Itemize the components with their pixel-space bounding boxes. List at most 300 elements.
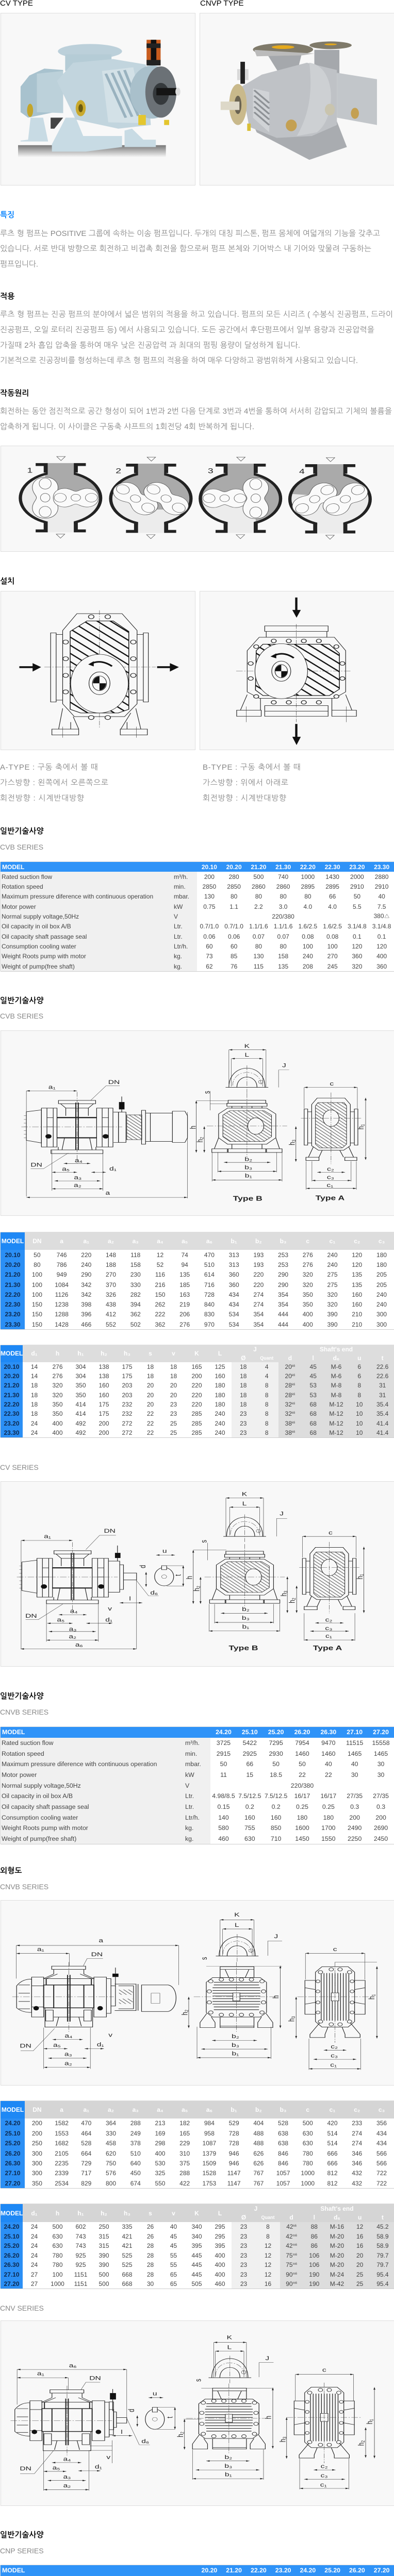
table: CVB dimensions part 1: 360 (229, 1271, 239, 1278)
table: CVB dimensions part 2: h (56, 1350, 59, 1357)
table: CVB series specifications: Oil capacity in oil box A/B (2, 923, 71, 930)
table: CVB dimensions part 1: 270 (106, 1271, 116, 1278)
table: CVB dimensions part 1: 240 (327, 1251, 337, 1259)
side view with shaft: d (127, 2409, 136, 2412)
table: CVB dimensions part 1: 94 (181, 1261, 188, 1268)
table: CVB dimensions part 1: 135 (179, 1271, 190, 1278)
table: CNVB dimensions part 1: 1057 (276, 2170, 290, 2177)
table: CVB dimensions part 1: 210 (352, 1321, 362, 1328)
diagram step 3: 3 (208, 467, 214, 475)
front view (176, 2334, 273, 2480)
table: CNVB dimensions part 2: 925 (75, 2252, 86, 2259)
table: CVB dimensions part 2: 18 (240, 1392, 247, 1399)
side view with motor: a₃ (74, 1174, 81, 1180)
side view with motor: a₄ (64, 2032, 73, 2039)
table: CVB dimensions part 2: 41.4 (376, 1420, 388, 1427)
side view Type A (288, 1080, 366, 1202)
table: CVB dimensions part 2: 18 (31, 1382, 38, 1389)
table: CNVB dimensions part 1: 528 (81, 2140, 91, 2147)
table: CVB series specifications: 1000 (301, 873, 315, 880)
table: CVB dimensions part 2: s (149, 1350, 152, 1357)
table: CVB series specifications: 4.0 (304, 903, 312, 910)
table: CVB dimensions part 2: 180 (215, 1392, 225, 1399)
table: CNVB series specifications: Weight Roots pump with motor (2, 1824, 88, 1832)
table: CVB dimensions part 2: 53 (310, 1382, 317, 1389)
table: CVB dimensions part 2: 200 (191, 1372, 202, 1380)
table: CVB series specifications: Oil capacity shaft passage seal (2, 933, 87, 940)
side view with motor: DN (20, 2043, 31, 2049)
table: CVB series specifications: 80 (231, 893, 237, 900)
table: CVB dimensions part 1: 434 (229, 1301, 239, 1308)
side view with motor (12, 1937, 179, 2069)
table: CNVB dimensions part 2: 390 (98, 2252, 109, 2259)
table: CNP series specifications: 20.20 (201, 2567, 217, 2574)
table: CNVB dimensions part 1: 780 (303, 2160, 313, 2167)
table: CVB dimensions part 1: 275 (327, 1281, 337, 1289)
panel: CNVB outline drawing (1, 1900, 394, 2086)
table: CNVB dimensions part 2: 23 (240, 2252, 247, 2259)
table: CNVB dimensions part 1: 728 (229, 2140, 239, 2147)
table: CNVB dimensions part 2: M-16 (330, 2223, 344, 2230)
table: CVB dimensions part 1: a₃ (133, 1238, 139, 1245)
table: CNVB dimensions part 1 (1, 2101, 394, 2188)
table: CVB dimensions part 1: 470 (204, 1251, 215, 1259)
table: CNVB series specifications: 15 (246, 1771, 253, 1778)
table: CNVB series specifications: kg. (185, 1824, 193, 1832)
front view Type B: Type B (229, 1645, 258, 1652)
table: CVB dimensions part 2: M-12 (329, 1401, 343, 1408)
side view Type A: c₁ (326, 1182, 334, 1188)
text block: B-type installation notes: B-TYPE : 구동 축에서 볼 때 (203, 763, 301, 772)
table: CVB dimensions part 2: 240 (215, 1420, 225, 1427)
table: CVB dimensions part 2: 18 (240, 1372, 247, 1380)
table: CVB series specifications: 21.20 (251, 863, 266, 871)
table: CNVB dimensions part 1: 1000 (301, 2170, 315, 2177)
table: CNVB dimensions part 1: 750 (106, 2160, 116, 2167)
table: CNVB series specifications: 0.25 (296, 1803, 308, 1810)
table: CNVB dimensions part 2: 65 (170, 2271, 177, 2278)
table: CNVB dimensions part 2: h₁ (77, 2210, 84, 2217)
table: CVB dimensions part 2: 45 (310, 1363, 317, 1370)
table: CNVB dimensions part 1: 1528 (203, 2170, 216, 2177)
table: CVB dimensions part 1: 326 (106, 1291, 116, 1298)
table: CVB dimensions part 1: 786 (57, 1261, 67, 1268)
table: CNVB series specifications: 26.30 (320, 1728, 336, 1736)
table: CNVB series specifications (1, 1727, 394, 1844)
table: CNVB dimensions part 1: 1379 (203, 2150, 216, 2157)
table: CVB series specifications: 200 (204, 873, 215, 880)
table: CNVB dimensions part 1: 364 (106, 2120, 116, 2127)
table: CNVB series specifications: 27.10 (347, 1728, 363, 1736)
front view (180, 1911, 282, 2059)
table: CVB dimensions part 1: 80 (34, 1261, 41, 1268)
table: CVB dimensions part 2: 8 (265, 1420, 269, 1427)
table: CNVB dimensions part 2: 45 (170, 2233, 177, 2240)
table: CVB dimensions part 2: 350 (52, 1410, 63, 1417)
table: CNVB dimensions part 2: 24 (31, 2223, 38, 2230)
table: CVB dimensions part 2: 4 (265, 1363, 269, 1370)
table: CNVB series specifications: 220/380 (291, 1782, 314, 1789)
table: CNVB series specifications: 1465 (374, 1750, 388, 1757)
table: CNVB dimensions part 2: 12 (356, 2223, 363, 2230)
table: CNVB series specifications: Weight of pump(free shaft) (2, 1835, 76, 1842)
front view Type B: h (185, 1576, 194, 1580)
table: CNVB dimensions part 1: 1509 (203, 2160, 216, 2167)
table: CNVB dimensions part 1: 300 (32, 2170, 42, 2177)
table: CVB dimensions part 2: 285 (191, 1420, 202, 1427)
table: CVB dimensions part 2: 240 (215, 1429, 225, 1436)
table: CVB series specifications: m³/h. (174, 873, 188, 880)
front view Type B: b₁ (242, 1623, 250, 1630)
table: CVB dimensions part 1: 216 (155, 1281, 165, 1289)
table: CNVB series specifications: kg. (185, 1835, 193, 1842)
table: CNVB dimensions part 2: h₃ (124, 2210, 130, 2217)
table: CNVB dimensions part 2: 79.7 (376, 2252, 389, 2259)
table: CVB dimensions part 1: b₁ (231, 1238, 237, 1245)
table: CNVB series specifications: 50 (272, 1760, 280, 1768)
table: CVB dimensions part 2: h₁ (77, 1350, 84, 1357)
front view Type B: J (280, 1511, 284, 1517)
table: CNVB dimensions part 2: 55 (170, 2252, 177, 2259)
table: CNVB dimensions part 1: c₂ (354, 2106, 360, 2113)
table: CVB dimensions part 1: 728 (204, 1291, 215, 1298)
table: CNVB dimensions part 2: 1151 (74, 2280, 87, 2287)
table: CNVB series specifications: 160 (244, 1814, 255, 1821)
table: CNVB series specifications: 7295 (269, 1739, 283, 1747)
table: CNVB dimensions part 2: 525 (122, 2261, 133, 2268)
table: CNVB dimensions part 2: 24 (31, 2242, 38, 2249)
side view with motor (21, 1079, 188, 1198)
table: CVB dimensions part 1: b₂ (255, 1238, 262, 1245)
table: CNVB dimensions part 2: 315 (98, 2242, 109, 2249)
table: CVB series specifications: 2.2 (254, 903, 263, 910)
heading: outline CNVB: 외형도 (0, 1867, 22, 1875)
table: CVB dimensions part 2: 23.20 (4, 1420, 20, 1427)
table: CNVB dimensions part 1: 666 (327, 2160, 337, 2167)
table: CNVB dimensions part 1: a (60, 2106, 63, 2113)
table: CVB series specifications: 158 (278, 953, 288, 960)
table: CVB series specifications: 0.08 (302, 933, 314, 940)
side view with shaft: a₅ (53, 2465, 60, 2471)
table: CVB dimensions part 2: 24 (31, 1429, 38, 1436)
table: CVB dimensions part 1: 320 (327, 1301, 337, 1308)
table: CVB dimensions part 1: 23.20 (5, 1311, 21, 1318)
side view with shaft (17, 1528, 159, 1649)
table: CNVB dimensions part 1: 27.10 (5, 2170, 21, 2177)
table: CVB dimensions part 1: 398 (81, 1301, 91, 1308)
table: CNVB dimensions part 1: 800 (106, 2180, 116, 2187)
side view: c₁ (330, 2061, 337, 2068)
table: CNVB dimensions part 1: 550 (155, 2180, 165, 2187)
table: CVB dimensions part 1: 400 (303, 1311, 313, 1318)
table: CVB dimensions part 2: 14 (31, 1372, 38, 1380)
table: CNVB dimensions part 1: 356 (376, 2120, 387, 2127)
table: CVB series specifications: 0.1 (353, 933, 362, 940)
table: CVB series specifications: Ltr. (174, 933, 183, 940)
side view with motor: d₁ (97, 2041, 104, 2048)
table: CNVB dimensions part 2: M-24 (330, 2271, 344, 2278)
side view Type A: c₃ (327, 1174, 334, 1180)
table: CNVB dimensions part 2: 668 (122, 2271, 133, 2278)
side view Type A: h₃ (288, 1140, 297, 1145)
table: CNVB dimensions part 1: 767 (253, 2170, 264, 2177)
table: CNVB dimensions part 1: 325 (155, 2170, 165, 2177)
text block: applications paragraph: 기본적으로 진공장비를 형성하는데 루츠 형 펌프의 적용을 하여 매우 다양하고 광범위하게 사용되고 있습니다. (0, 357, 358, 365)
table: CNVB dimensions part 1: c (306, 2106, 309, 2113)
table: CNP series specifications (1, 2565, 394, 2576)
front view: b₂ (232, 2033, 239, 2040)
side view with motor: a₂ (74, 1182, 81, 1188)
table: CVB dimensions part 1: 716 (204, 1281, 215, 1289)
front view: J (265, 2355, 269, 2362)
table: CNVB series specifications: 11 (220, 1771, 227, 1778)
side view with shaft: a₄ (70, 1608, 78, 1614)
table: CNVB dimensions part 2: 421 (122, 2233, 133, 2240)
text block: applications paragraph: 진공펌프, 오일 로터리 진공펌프 등) 에서 사용되고 있습니다. 도든 공간에서 후단펌프에서 일부 용량과 진공압력을 (0, 326, 374, 334)
side view with shaft: a₆ (69, 2363, 77, 2369)
table: CNVB series specifications: 710 (271, 1835, 281, 1842)
series label: CVB: CVB SERIES (0, 843, 43, 851)
table: CVB dimensions part 2: v (172, 1350, 175, 1357)
table: CVB dimensions part 2: 18 (31, 1410, 38, 1417)
table: CVB dimensions part 1: 354 (278, 1291, 288, 1298)
table: CNVB series specifications: 22 (325, 1771, 332, 1778)
table: CVB dimensions part 2: 22.30 (4, 1410, 20, 1417)
diagram step 3 (198, 457, 283, 539)
table: CNVB dimensions part 1: 829 (81, 2180, 91, 2187)
table: CVB dimensions part 1: 1428 (55, 1321, 69, 1328)
table: CVB dimensions part 2: Shaft's end (320, 1346, 353, 1353)
text block: features paragraph: 있습니다. 서로 반대 방향으로 회전하고 비접촉 회전을 함으로써 펌프 본체와 기어박스 내 기어와 맞물려 구동하는 (0, 244, 371, 253)
table: CNVB series specifications: 850 (271, 1824, 281, 1832)
table: CVB dimensions part 2: 22 (147, 1429, 154, 1436)
side view with shaft: d₁ (105, 1617, 113, 1623)
table: CNVB dimensions part 1: 984 (204, 2120, 215, 2127)
table: CNVB dimensions part 2: 28 (147, 2252, 154, 2259)
table: CNVB series specifications: m³/h. (185, 1739, 200, 1747)
table: CNVB dimensions part 2: l (314, 2214, 315, 2221)
side view with shaft: a₄ (63, 2456, 71, 2462)
heading: general specifications CNP: 일반기술사양 (0, 2531, 44, 2539)
table: CVB dimensions part 2: 200 (98, 1429, 109, 1436)
table: CVB dimensions part 1: 970 (204, 1321, 215, 1328)
table: CNVB dimensions part 2: 743 (75, 2233, 86, 2240)
table: CNVB series specifications: 180 (297, 1814, 307, 1821)
table: CNVB dimensions part 2: 40 (170, 2223, 177, 2230)
table: CNP series specifications: MODEL (2, 2567, 25, 2574)
table: CVB dimensions part 1: 350 (303, 1301, 313, 1308)
side view: h₃ (287, 2016, 296, 2022)
table: CVB dimensions part 1: 412 (106, 1311, 116, 1318)
table: CVB dimensions part 2: J (253, 1346, 257, 1353)
side view: c₃ (321, 2472, 328, 2479)
table: CVB series specifications: 2860 (276, 883, 290, 890)
table: CNVB dimensions part 2: v (172, 2210, 175, 2217)
table: CVB dimensions part 1: 262 (155, 1301, 165, 1308)
table: CNVB series specifications: 2925 (243, 1750, 257, 1757)
table: CNVB dimensions part 2: Shaft's end (320, 2205, 354, 2212)
table: CVB dimensions part 2: MODEL (1, 1350, 23, 1357)
table: CNVB dimensions part 1: 213 (155, 2120, 165, 2127)
table: CVB dimensions part 2: 180 (215, 1382, 225, 1389)
side view with motor: a₅ (53, 2042, 61, 2048)
side view with motor: v (108, 2031, 112, 2038)
table: CNVB dimensions part 2: 27 (31, 2280, 38, 2287)
table: CNVB series specifications: 40 (325, 1760, 332, 1768)
table: CVB dimensions part 1: 160 (352, 1301, 362, 1308)
table: CVB dimensions part 1: 150 (155, 1291, 165, 1298)
table: CVB series specifications: 320 (352, 963, 362, 970)
table: CNVB dimensions part 2: 250 (98, 2223, 109, 2230)
table: CNVB dimensions part 2: 23 (240, 2233, 247, 2240)
table: CNVB series specifications: Maximum pressure diference with continuous operation (2, 1760, 157, 1768)
table: CNVB dimensions part 1: 812 (327, 2170, 337, 2177)
table: CVB series specifications: 280 (229, 873, 239, 880)
table: CVB series specifications: 130 (204, 893, 215, 900)
table: CNVB series specifications: 160 (271, 1814, 281, 1821)
table: CVB dimensions part 2: M-8 (331, 1392, 341, 1399)
table: CNVB dimensions part 2: 75m6 (286, 2261, 297, 2268)
table: CVB dimensions part 1: 206 (179, 1311, 190, 1318)
table: CNVB dimensions part 2: 100 (52, 2271, 63, 2278)
table: CNVB dimensions part 1: 27.20 (5, 2180, 21, 2187)
table: CNVB series specifications: 30 (377, 1760, 384, 1768)
side view (287, 1946, 377, 2070)
table: CVB dimensions part 2: 31 (379, 1392, 386, 1399)
series label: CNVB: CNVB SERIES (0, 1708, 48, 1716)
table: CNVB dimensions part 1: 812 (327, 2180, 337, 2187)
table: CVB dimensions part 2: 23 (170, 1401, 177, 1408)
text block: features paragraph (0, 229, 380, 269)
table: CVB dimensions part 1: 614 (204, 1271, 215, 1278)
table: CNVB dimensions part 2: 12 (265, 2252, 271, 2259)
table: CNVB dimensions part 1: 488 (253, 2140, 264, 2147)
table: CVB dimensions part 2: 28k6 (285, 1392, 295, 1399)
side view with shaft: DN (20, 2465, 31, 2472)
table: CNVB dimensions part 1: 450 (130, 2170, 141, 2177)
table: CVB series specifications: 500 (253, 873, 264, 880)
table: CNVB dimensions part 2: 190 (309, 2271, 319, 2278)
table: CNVB dimensions part 2: 58.9 (376, 2242, 389, 2249)
table: CNVB series specifications: 22 (299, 1771, 306, 1778)
table: CVB dimensions part 1: 150 (32, 1311, 42, 1318)
table: CVB series specifications: 66 (329, 893, 336, 900)
table: CVB series specifications: 120 (352, 943, 362, 950)
side view with shaft: a₂ (63, 2482, 71, 2489)
table: CNVB dimensions part 2: 16 (356, 2242, 363, 2249)
table: CVB dimensions part 2: 200 (98, 1420, 109, 1427)
table: CNVB dimensions part 2: K (194, 2210, 199, 2217)
table: CNVB series specifications: 50 (299, 1760, 306, 1768)
table: CNVB dimensions part 2: 500 (52, 2223, 63, 2230)
table: CNVB series specifications: 0.25 (322, 1803, 335, 1810)
table: CVB series specifications: 740 (278, 873, 288, 880)
table: CVB dimensions part 2: 400 (52, 1429, 63, 1436)
table: CNVB series specifications: Ltr. (185, 1792, 194, 1800)
table: CNVB series specifications: 30 (377, 1771, 384, 1778)
table: CNVB series specifications: mbar. (185, 1760, 201, 1768)
side view with motor: DN (108, 1079, 120, 1085)
table: CNVB dimensions part 2 (1, 2204, 394, 2289)
table: CNVB series specifications: 2450 (374, 1835, 388, 1842)
table: CNVB dimensions part 2: 8 (266, 2223, 270, 2230)
table: CNVB dimensions part 2: Quant (261, 2215, 274, 2220)
table: CNVB dimensions part 1: 717 (81, 2170, 91, 2177)
heading: general specifications CVB: 일반기술사양 (0, 827, 44, 836)
table: CVB dimensions part 2: 35.4 (376, 1410, 388, 1417)
text block: operating principle paragraph: 회전하는 동안 점진적으로 공간 형성이 되어 1번과 2번 다음 단계로 3번과 4번을 통하여 서서히 감압되고 기체의 볼륨을 (0, 407, 392, 416)
table: CNP series specifications: 26.20 (349, 2567, 365, 2574)
table: CNVB dimensions part 1: 958 (204, 2130, 215, 2137)
table: CNVB dimensions part 1: 626 (253, 2160, 264, 2167)
table: CNVB dimensions part 1: 26.20 (5, 2150, 21, 2157)
panel: A-type installation drawing (1, 591, 195, 750)
table: CVB series specifications: 50 (354, 893, 360, 900)
table: CNVB dimensions part 1: 434 (376, 2130, 387, 2137)
table: CNVB dimensions part 1: 434 (376, 2140, 387, 2147)
table: CVB series specifications: mbar. (174, 893, 189, 900)
table: CVB series specifications: 80 (304, 893, 311, 900)
text block: A-type installation notes: 가스방향 : 왼쪽에서 오른쪽으로 (0, 778, 108, 787)
table: CVB dimensions part 1: 276 (179, 1321, 190, 1328)
table: CVB series specifications: 245 (327, 963, 338, 970)
table: CNVB series specifications: 27/35 (347, 1792, 363, 1800)
table: CNVB dimensions part 1: a₄ (157, 2106, 163, 2113)
table: CVB series specifications: 40 (378, 893, 385, 900)
table: CVB dimensions part 2: 18 (170, 1363, 177, 1370)
table: CNVB dimensions part 1: 626 (253, 2150, 264, 2157)
table: CVB dimensions part 1: 274 (253, 1291, 264, 1298)
table: CVB dimensions part 1: 840 (204, 1301, 215, 1308)
text block: B-type installation notes: 가스방향 : 위에서 아래로 (203, 778, 288, 787)
table: CVB dimensions part 2: 165 (191, 1363, 202, 1370)
table: CVB series specifications: 80 (280, 893, 287, 900)
table: CVB dimensions part 2: 320 (52, 1392, 63, 1399)
table: CVB series specifications: 360 (352, 953, 362, 960)
table: CVB series specifications: Rated suction flow (2, 873, 52, 880)
table: CNVB series specifications: 200 (349, 1814, 360, 1821)
table: CVB dimensions part 2: 285 (191, 1429, 202, 1436)
table: CVB dimensions part 1: 21.20 (5, 1271, 21, 1278)
table: CNVB series specifications: 5422 (243, 1739, 257, 1747)
table: CNVB dimensions part 1: 846 (278, 2160, 288, 2167)
table: CNVB series specifications: 7954 (295, 1739, 309, 1747)
table: CVB series specifications: 208 (303, 963, 313, 970)
table: CVB dimensions part 2: 232 (122, 1410, 133, 1417)
table: CVB series specifications: Normal supply voltage,50Hz (2, 913, 79, 920)
table: CNVB dimensions part 1: 630 (303, 2130, 313, 2137)
table: CNVB dimensions part 2: 340 (191, 2233, 202, 2240)
table: CVB dimensions part 1: 12 (157, 1251, 163, 1259)
table: CVB dimensions part 2: 8 (265, 1401, 269, 1408)
table: CNVB dimensions part 2: M-20 (330, 2261, 344, 2268)
table: CNVB dimensions part 2: 925 (75, 2261, 86, 2268)
table: CVB dimensions part 2: 8 (265, 1429, 269, 1436)
front view: b₃ (232, 2042, 239, 2048)
table: CVB dimensions part 1: 20.10 (5, 1251, 21, 1259)
table: CNVB series specifications: 3725 (217, 1739, 231, 1747)
side view with motor: a (98, 1937, 103, 1944)
table: CNVB series specifications: 2250 (348, 1835, 362, 1842)
table: CVB series specifications: 60 (206, 943, 213, 950)
table: CNVB dimensions part 2: 395 (191, 2242, 202, 2249)
table: CNVB series specifications: 180 (323, 1814, 334, 1821)
table: CVB dimensions part 1: 390 (327, 1321, 337, 1328)
table: CVB dimensions part 2: 38k6 (285, 1429, 295, 1436)
table: CNVB dimensions part 2: 630 (52, 2233, 63, 2240)
table: CVB series specifications: 0.07 (277, 933, 289, 940)
table: CVB dimensions part 2: 22.20 (4, 1401, 20, 1408)
